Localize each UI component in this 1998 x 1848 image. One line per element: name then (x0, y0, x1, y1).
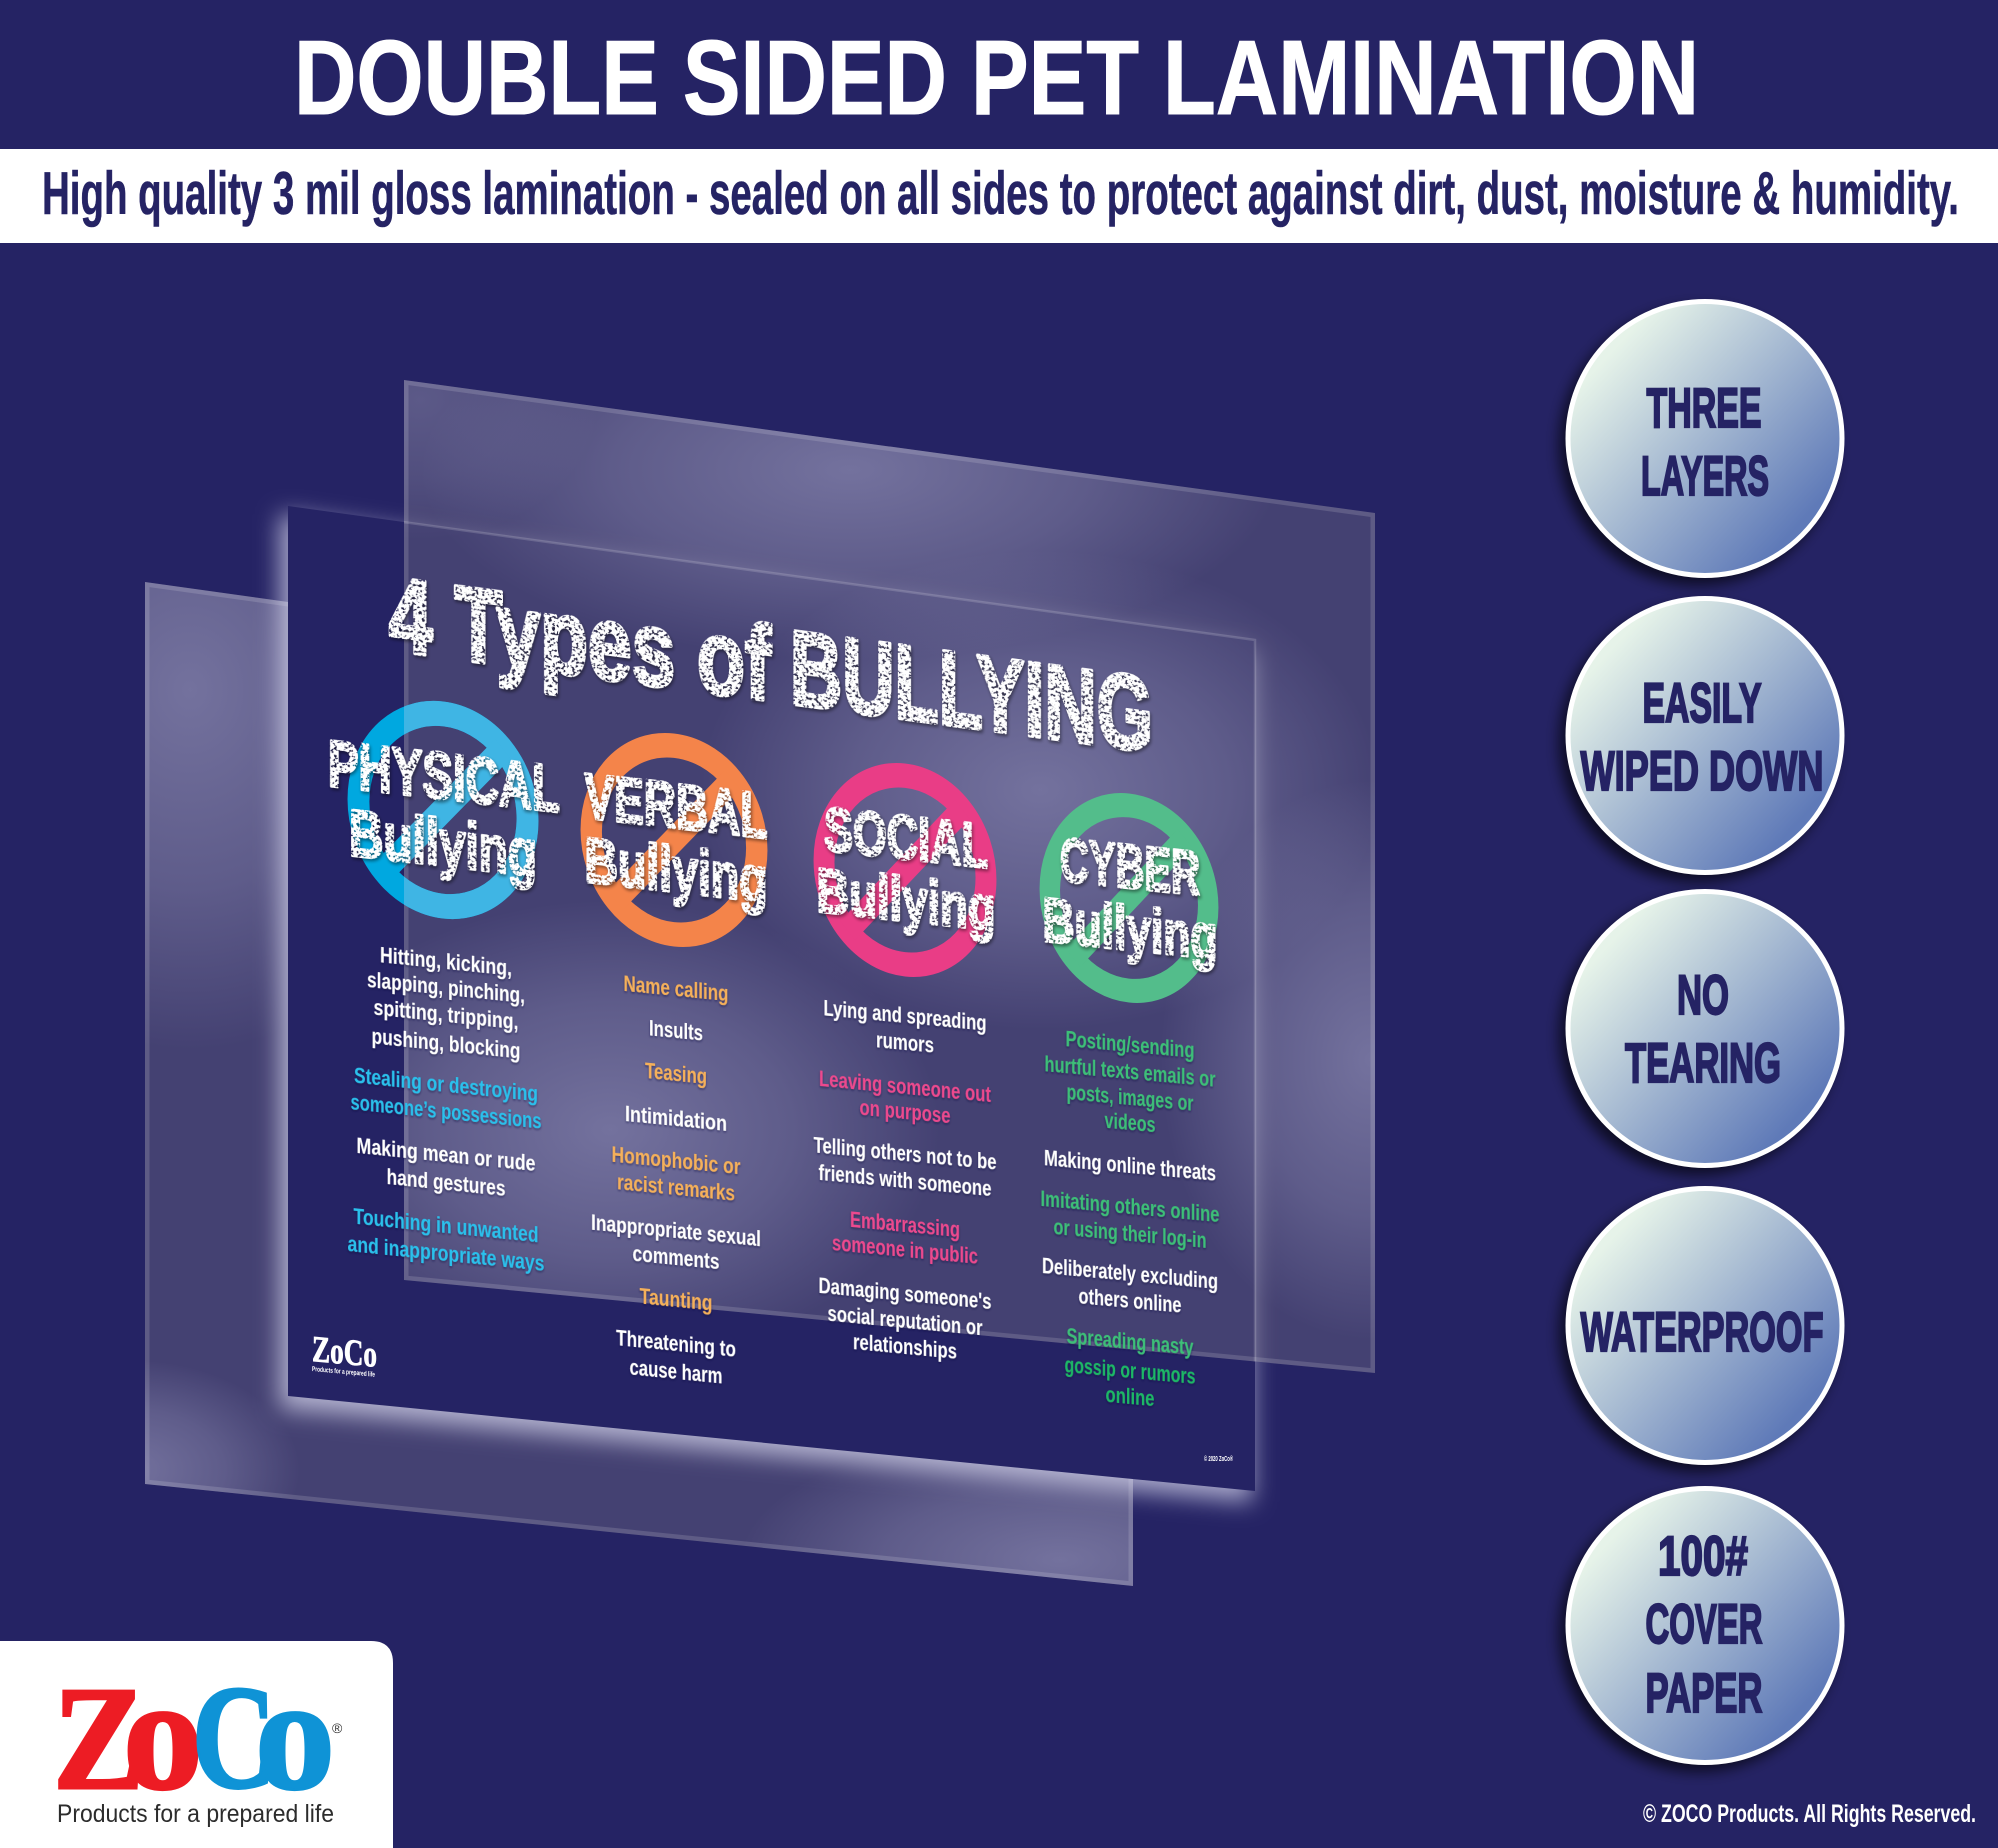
list: verbal bullying: Insults (649, 1015, 703, 1046)
list: physical bullying: slapping, pinching, (367, 967, 525, 1008)
badge: easily wiped down: WIPED DOWN (1580, 739, 1824, 802)
logo panel: o (123, 1645, 203, 1823)
badge: easily wiped down: EASILY (1642, 671, 1762, 734)
list: physical bullying: hand gestures (386, 1164, 506, 1201)
list: verbal bullying: Intimidation (625, 1101, 727, 1136)
poster small logo: ZoCo (312, 1329, 377, 1376)
list: social bullying: someone in public (832, 1230, 978, 1269)
no-symbol: cyber (1050, 797, 1208, 999)
badge: no tearing: TEARING (1625, 1031, 1781, 1094)
list: physical bullying: Making mean or rude (356, 1133, 536, 1176)
list: physical bullying: someone’s possessions (350, 1089, 542, 1134)
list: physical bullying: spitting, tripping, (374, 995, 518, 1034)
heading: cyber bullying: CYBER (1060, 826, 1200, 909)
list: social bullying: Damaging someone's (818, 1273, 992, 1314)
list: social bullying: Telling others not to be (814, 1132, 996, 1175)
list: verbal bullying: Teasing (645, 1058, 707, 1089)
list: cyber bullying: videos (1105, 1108, 1155, 1137)
list: cyber bullying: online (1105, 1382, 1155, 1411)
list: cyber bullying: gossip or rumors (1064, 1352, 1196, 1389)
list: verbal bullying: Name calling (624, 971, 728, 1006)
list: cyber bullying: Making online threats (1044, 1145, 1216, 1186)
logo panel: o (255, 1645, 335, 1823)
list: physical bullying: and inappropriate ways (348, 1231, 544, 1276)
heading: physical bullying: Bullying (349, 796, 537, 892)
no-symbol: social (824, 767, 986, 973)
list: social bullying: on purpose (860, 1095, 950, 1128)
list: verbal bullying: Taunting (640, 1283, 712, 1316)
list: verbal bullying (591, 968, 761, 1392)
poster heading (389, 554, 1153, 775)
list: physical bullying: Touching in unwanted (354, 1204, 538, 1247)
printed poster sheet (288, 506, 1255, 1491)
badge: three layers: LAYERS (1641, 444, 1769, 507)
heading: physical bullying: PHYSICAL (328, 727, 560, 827)
list: physical bullying: pushing, blocking (372, 1023, 520, 1064)
list: social bullying: Lying and spreading (824, 995, 986, 1036)
front lamination sheet (404, 380, 1375, 1373)
list: verbal bullying: Homophobic or (612, 1142, 741, 1179)
list: physical bullying: Hitting, kicking, (380, 942, 512, 981)
poster small logo: Products for a prepared life (312, 1366, 375, 1379)
list: social bullying: friends with someone (818, 1160, 992, 1201)
heading: verbal bullying: VERBAL (584, 760, 768, 852)
heading: social bullying (816, 794, 996, 945)
heading: physical bullying (328, 727, 560, 894)
logo panel: Z (53, 1657, 145, 1821)
list: social bullying: Embarrassing (850, 1207, 960, 1242)
logo panel: Products for a prepared life (57, 1800, 334, 1828)
heading: verbal bullying: Bullying (584, 824, 768, 916)
list: cyber bullying: Imitating others online (1040, 1186, 1220, 1227)
badge: three layers (1559, 302, 1842, 585)
list: physical bullying (348, 939, 544, 1276)
list: physical bullying: Stealing or destroying (354, 1063, 538, 1106)
no-symbol: physical (358, 704, 528, 916)
list: verbal bullying: racist remarks (617, 1169, 735, 1206)
badge: 100# cover paper: COVER (1646, 1592, 1762, 1655)
title: DOUBLE SIDED PET LAMINATION (294, 19, 1699, 137)
logo panel (0, 1641, 393, 1848)
heading: cyber bullying (1042, 824, 1218, 973)
list: cyber bullying: others online (1078, 1283, 1182, 1318)
badge: easily wiped down (1559, 598, 1842, 882)
heading: verbal bullying (584, 760, 768, 916)
list: cyber bullying: or using their log-in (1054, 1214, 1206, 1253)
list: verbal bullying: cause harm (630, 1354, 722, 1389)
poster copyright: © 2020 ZoCo® (1204, 1455, 1234, 1463)
badge: 100# cover paper: PAPER (1646, 1661, 1762, 1724)
list: cyber bullying: posts, images or (1066, 1079, 1194, 1116)
badge: no tearing: NO (1677, 963, 1729, 1026)
logo panel: C (192, 1656, 276, 1820)
poster heading: 4 Types of (389, 554, 771, 724)
list: cyber bullying: hurtful texts emails or (1044, 1051, 1216, 1092)
list: social bullying: relationships (853, 1329, 957, 1364)
logo panel: ® (332, 1720, 343, 1736)
back lamination sheet (145, 582, 1133, 1586)
heading: cyber bullying: Bullying (1042, 886, 1218, 973)
list: cyber bullying (1040, 1024, 1220, 1417)
list: social bullying: social reputation or (828, 1301, 983, 1340)
badge: waterproof (1559, 1188, 1842, 1472)
heading: social bullying: SOCIAL (824, 795, 988, 882)
list: social bullying: rumors (876, 1027, 934, 1058)
list: social bullying: Leaving someone out (819, 1066, 992, 1107)
list: cyber bullying: Deliberately excluding (1042, 1253, 1218, 1294)
poster heading: BULLYING (790, 608, 1153, 775)
heading: social bullying: Bullying (816, 856, 996, 945)
list: verbal bullying: comments (632, 1241, 720, 1274)
list: verbal bullying: Inappropriate sexual (591, 1210, 761, 1251)
subtitle band (0, 149, 1998, 243)
print sheet glow (280, 514, 1252, 1502)
list: cyber bullying: Spreading nasty (1066, 1323, 1194, 1360)
no-symbol: verbal (591, 737, 757, 943)
list: social bullying (814, 994, 996, 1368)
badge: 100# cover paper (1559, 1488, 1842, 1772)
badge: 100# cover paper: 100# (1658, 1524, 1748, 1587)
list: cyber bullying: Posting/sending (1065, 1026, 1195, 1063)
badge: three layers: THREE (1646, 376, 1762, 439)
list: verbal bullying: Threatening to (616, 1325, 736, 1362)
badge: no tearing (1559, 892, 1842, 1175)
badge: waterproof: WATERPROOF (1580, 1300, 1824, 1363)
